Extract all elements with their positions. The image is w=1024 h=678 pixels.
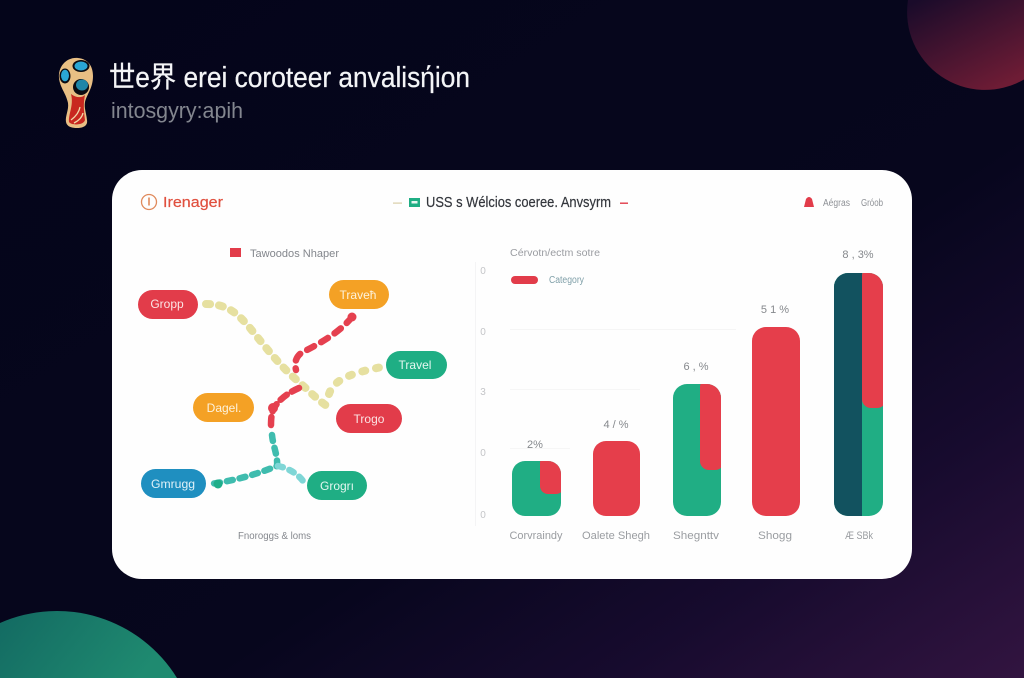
connector: teal dashed	[210, 435, 303, 484]
node: Travel orange	[329, 280, 389, 309]
y axis labels: 3	[480, 387, 486, 398]
bar 2: Oalete Shegh	[582, 530, 650, 542]
card header: left brand: Irenager	[163, 194, 223, 211]
bar 3: 6 , %	[683, 361, 709, 373]
bar 1: 2%	[527, 439, 543, 451]
card header: left brand	[142, 194, 223, 211]
y axis labels: 0	[480, 448, 486, 459]
node: Group green: Grogrı	[320, 479, 354, 493]
bar 4: Shogg	[758, 530, 792, 542]
card header: right controls: Gróob	[861, 198, 883, 209]
decorative circle: bottom left	[0, 611, 177, 678]
bar 4: 5 1 %	[761, 304, 789, 316]
connector: red dashed	[271, 317, 352, 428]
decorative circle: top right	[907, 0, 1024, 90]
node: Group blue	[141, 469, 206, 498]
chart legend: Category	[549, 275, 584, 286]
flow legend: Tawoodos Nhaper	[250, 248, 339, 260]
y axis labels: 0	[480, 266, 486, 277]
node: Trogo red: Trogo	[354, 412, 385, 426]
card header: right controls	[804, 197, 883, 209]
node: Group red: Gropp	[150, 297, 184, 311]
y axis labels	[480, 266, 486, 521]
card header: center title: USS s Wélcios coeree. Anvsyrm	[426, 194, 611, 211]
node: Travel green: Travel	[399, 358, 431, 372]
node: Dagel orange: Dagel.	[207, 401, 241, 415]
bar 2	[582, 419, 650, 542]
chart heading: Cérvotn/ectm sotre	[510, 248, 600, 259]
title: 世e界 erei coroteer anvalisήion	[109, 61, 470, 94]
node: Group green	[307, 471, 367, 500]
bar 4	[752, 304, 800, 542]
node: Travel green	[386, 351, 447, 379]
flow caption: Fnoroggs & loms	[238, 530, 311, 542]
bar 1	[510, 439, 564, 542]
chart legend	[511, 275, 584, 286]
icon: trophy logo	[59, 58, 93, 128]
subtitle: intosgyry:apih	[111, 98, 243, 123]
bar 5	[834, 249, 886, 542]
flow diagram	[138, 248, 447, 542]
connector: yellow dashed	[206, 304, 382, 408]
bar 5: Æ SBk	[845, 530, 873, 542]
bar 3: Shegnttv	[673, 530, 720, 542]
y axis labels: 0	[480, 327, 486, 338]
y axis labels: 0	[480, 510, 486, 521]
node: Trogo red	[336, 404, 402, 433]
bar chart	[475, 248, 886, 542]
card header: right controls: Aégras	[823, 198, 850, 209]
bar 5: 8 , 3%	[842, 249, 874, 261]
bar 3	[673, 361, 724, 542]
node: Travel orange: Traveħ	[340, 288, 376, 302]
node: Group red	[138, 290, 198, 319]
node: Group blue: Gmrugg	[151, 477, 195, 491]
node: Dagel orange	[193, 393, 254, 422]
panel: main card	[112, 170, 912, 579]
bar 2: 4 / %	[603, 419, 629, 431]
bar 1: Corvraindy	[510, 530, 563, 542]
